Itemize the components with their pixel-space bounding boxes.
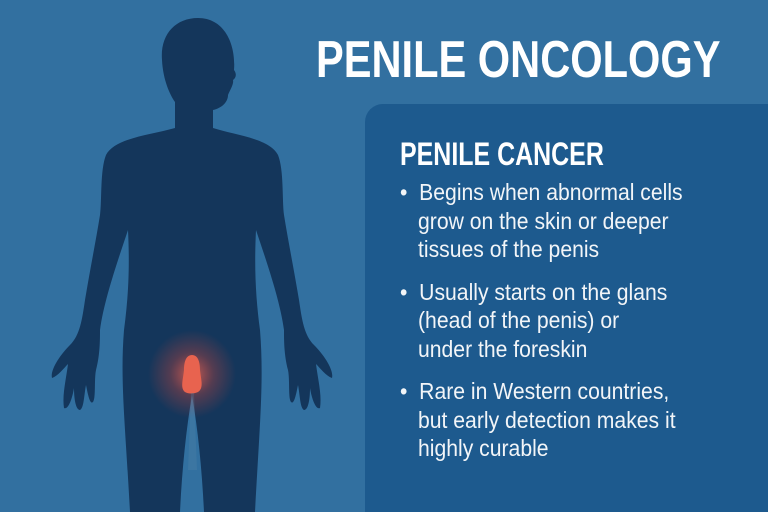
bullet list: • Begins when abnormal cells bbox=[400, 179, 683, 205]
figure: human silhouette bbox=[52, 18, 332, 512]
bullet list: • Rare in Western countries, bbox=[400, 378, 669, 404]
bullet list: grow on the skin or deeper bbox=[418, 208, 669, 234]
bullet list: (head of the penis) or bbox=[418, 307, 619, 333]
silhouette body bbox=[52, 18, 332, 512]
bullet list: • Usually starts on the glans bbox=[400, 278, 667, 304]
glow: tumor highlight bbox=[148, 330, 236, 470]
bullet list: but early detection makes it bbox=[418, 406, 676, 432]
bullet list bbox=[400, 179, 683, 461]
bullet list: tissues of the penis bbox=[418, 236, 599, 262]
panel: penile cancer bbox=[365, 104, 768, 512]
bullet list: under the foreskin bbox=[418, 336, 587, 362]
title: PENILE ONCOLOGY bbox=[316, 31, 720, 89]
bullet list: highly curable bbox=[418, 435, 549, 461]
heading: PENILE CANCER bbox=[400, 136, 604, 172]
